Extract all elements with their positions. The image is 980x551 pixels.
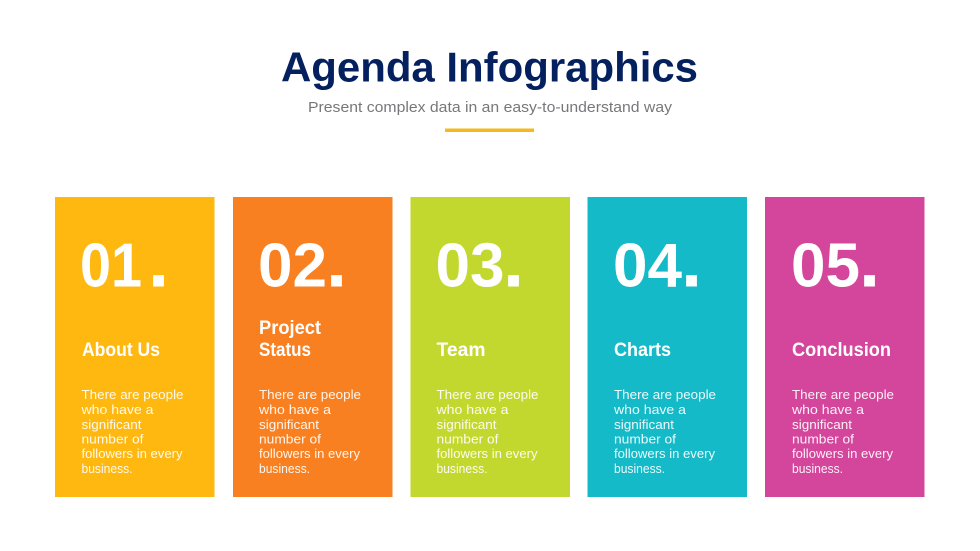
body text: There are people [436,387,538,402]
body text: who have a [80,402,154,417]
number 02: . [326,218,347,304]
heading: About Us: About Us [82,340,160,361]
body text: significant [436,417,497,432]
body text: significant [82,417,142,432]
title underline accent [445,128,534,132]
number 05: . [859,218,880,304]
body text: who have a [791,402,865,417]
panel: 04 Charts [588,197,747,497]
panel: 05 Conclusion [765,197,924,497]
body text: followers in every [259,446,361,461]
body text: number of [82,432,144,446]
body text: There are people [614,387,716,402]
number 04: . [681,218,702,304]
body text: number of [614,432,676,446]
body text: business. [259,461,310,476]
body text [613,387,716,476]
heading: Project Status [259,318,322,361]
body text: significant [614,417,674,432]
body text: who have a [613,402,687,417]
heading: Charts: Charts [614,340,671,361]
number 03: 03 [436,232,504,300]
panel: 03 Team [410,197,570,497]
body text: followers in every [614,446,716,461]
body text: followers in every [792,446,894,461]
panel: 01 About Us [55,197,214,497]
subtitle: Present complex data in an easy-to-understand way [308,99,673,116]
number 01: 01 [80,232,142,300]
body text: significant [259,417,319,432]
body text: significant [792,417,852,432]
body text: There are people [82,387,184,402]
heading: Team: Team [436,340,486,361]
body text: number of [259,432,321,446]
heading: Conclusion: Conclusion [792,340,891,361]
body text: business. [792,461,843,476]
number 02: 02 [258,232,327,300]
body text: business. [614,461,665,476]
number 05: 05 [791,232,860,300]
heading: Project Status: Project [259,318,322,339]
number 03: . [503,218,524,304]
body text [791,387,894,476]
body text [435,387,538,476]
heading: Project Status: Status [259,340,311,361]
body text: business. [436,461,488,476]
body text [80,387,184,476]
body text: number of [792,432,854,446]
body text: number of [436,432,499,446]
body text: business. [82,461,132,476]
body text [258,387,361,476]
body text: There are people [259,387,361,402]
panel: 02 Project Status [233,197,392,497]
body text: followers in every [436,446,538,461]
number 04: 04 [613,232,683,300]
number 01: . [148,218,169,304]
body text: followers in every [82,446,183,461]
title: Agenda Infographics [281,44,698,90]
body text: who have a [435,402,509,417]
body text: who have a [258,402,332,417]
body text: There are people [792,387,894,402]
